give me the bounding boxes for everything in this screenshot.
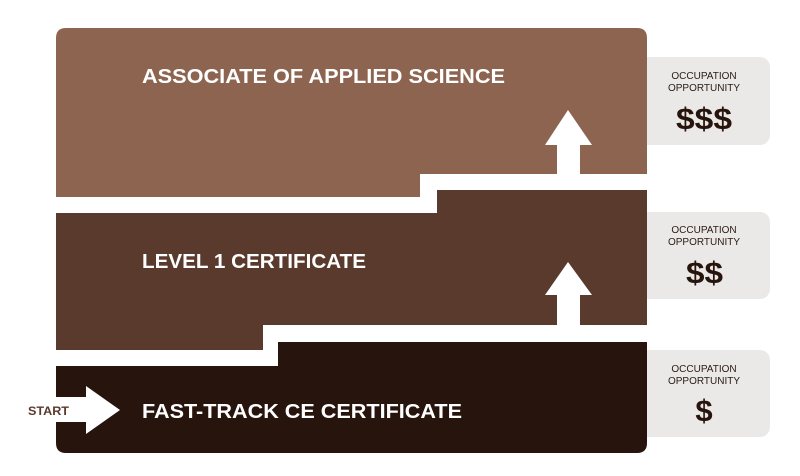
side box: opportunity $$: OPPORTUNITY — [668, 237, 740, 248]
panel: level 1 certificate: LEVEL 1 CERTIFICATE — [142, 251, 366, 273]
panel: fast-track ce certificate — [56, 342, 647, 453]
side box: opportunity $$$ — [630, 57, 770, 145]
panel: associate of applied science — [56, 28, 647, 197]
side box: opportunity $$$: OPPORTUNITY — [668, 83, 740, 94]
side box: opportunity $: OPPORTUNITY — [668, 376, 740, 387]
arrow: start — [28, 386, 120, 434]
side box: opportunity $$$: OCCUPATION — [671, 71, 737, 82]
panel: fast-track ce certificate: FAST-TRACK CE CERTIFICATE — [142, 401, 462, 423]
arrow: start: START — [28, 404, 70, 418]
side box: opportunity $$: $$ — [686, 255, 723, 290]
side box: opportunity $: OCCUPATION — [671, 364, 737, 375]
side box: opportunity $$ — [630, 212, 770, 299]
arrow: up to associate — [545, 110, 592, 190]
side box: opportunity $ — [630, 350, 770, 437]
side box: opportunity $: $ — [695, 393, 713, 428]
panel: associate of applied science: ASSOCIATE OF APPLIED SCIENCE — [142, 66, 505, 88]
side box: opportunity $$$: $$$ — [676, 101, 732, 136]
arrow: up to level 1 — [545, 262, 592, 342]
side box: opportunity $$: OCCUPATION — [671, 225, 737, 236]
panel: level 1 certificate — [56, 190, 647, 350]
